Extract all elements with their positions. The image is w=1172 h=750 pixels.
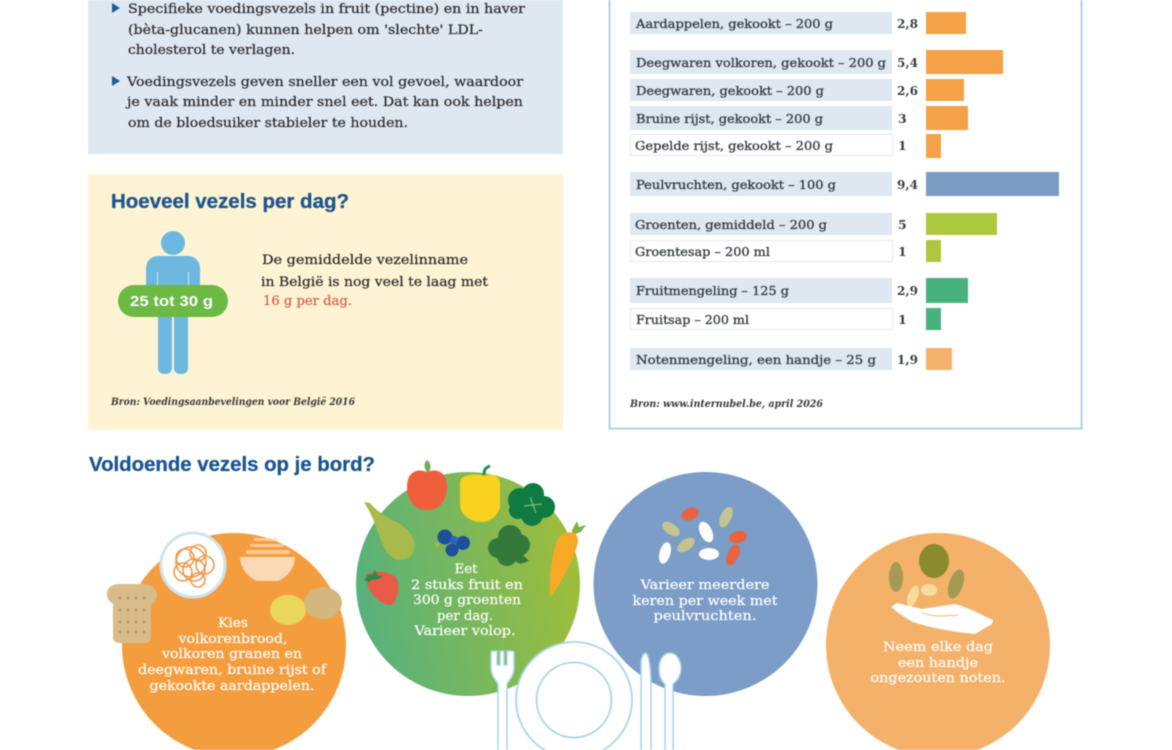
row: potatoes: Aardappelen, gekookt – 200 g (635, 16, 833, 31)
row: vegetable juice: 1 (898, 244, 907, 259)
icon: cereal bowl (240, 538, 295, 581)
icon: carrot (550, 521, 586, 597)
row: fruit juice: Fruitsap – 200 ml (636, 312, 749, 327)
text: nuts advice: een handje (898, 656, 978, 671)
row: wholegrain pasta: 5,4 (897, 55, 918, 70)
text: fruit and vegetable advice: Eet (454, 562, 478, 577)
text: nuts advice: ongezouten noten. (870, 671, 1006, 686)
row: fruit juice (630, 308, 941, 330)
row: vegetable juice (630, 240, 941, 262)
text: average intake: 16 g per dag. (263, 294, 352, 309)
icon: spinach (508, 483, 555, 526)
row: potatoes: 2,8 (897, 16, 918, 31)
text: grains advice: deegwaren, bruine rijst of (138, 663, 327, 678)
row: nuts (630, 348, 952, 370)
heading: on your plate: Voldoende vezels op je bord? (89, 454, 375, 476)
panel: fibre content bar chart (610, 0, 1082, 428)
text: fruit and vegetable advice (411, 562, 524, 639)
circle: grains (107, 533, 346, 750)
row: pasta (630, 79, 964, 101)
text: fruit and vegetable advice: 2 stuks fruit en (411, 578, 524, 593)
icon: potatoes (270, 587, 342, 625)
row: vegetable juice: Groentesap – 200 ml (635, 244, 770, 259)
bullet text: full feeling: je vaak minder en minder snel eet. Dat kan ook helpen (125, 95, 524, 110)
panel: fibre per day (88, 174, 563, 430)
row: wholegrain pasta (630, 50, 1003, 74)
row: pasta: 2,6 (897, 83, 918, 98)
icon: plate (516, 642, 632, 750)
row: brown rice: 3 (898, 111, 907, 126)
text: fruit and vegetable advice: Varieer volop. (413, 624, 516, 639)
icon: beans (657, 505, 748, 567)
text: average intake: De gemiddelde vezelinname (262, 253, 468, 268)
icon: knife (641, 653, 651, 750)
text: legumes advice: keren per week met (632, 594, 778, 609)
text: grains advice: volkoren granen en (161, 647, 303, 662)
icon: pear (364, 502, 415, 560)
circle: nuts (826, 533, 1050, 750)
heading: per day: Hoeveel vezels per dag? (111, 191, 349, 213)
source: recommendations: Bron: Voedingsaanbevelingen voor België 2016 (110, 397, 355, 408)
row: white rice (630, 134, 941, 158)
icon: broccoli (488, 525, 530, 566)
row: white rice: 1 (898, 138, 907, 153)
row: vegetables: 5 (898, 217, 907, 232)
row: vegetables: Groenten, gemiddeld – 200 g (635, 217, 827, 232)
panel: effects of fibre (88, 0, 563, 154)
text: nuts advice: Neem elke dag (883, 640, 993, 655)
row: vegetables (630, 213, 997, 235)
row: nuts: Notenmengeling, een handje – 25 g (636, 352, 876, 367)
text: fruit and vegetable advice: 300 g groenten (413, 593, 522, 608)
text: legumes advice: peulvruchten. (654, 609, 756, 624)
row: wholegrain pasta: Deegwaren volkoren, gekookt – 200 g (636, 55, 886, 70)
bullet text: full feeling: om de bloedsuiker stabieler te houden. (128, 116, 408, 131)
text: legumes advice (632, 578, 778, 624)
row: legumes (630, 172, 1059, 196)
icon: person with recommended amount (118, 231, 228, 374)
row: legumes: Peulvruchten, gekookt – 100 g (636, 177, 836, 192)
icon: spoon (659, 653, 681, 750)
icon: plate with spaghetti (161, 533, 225, 597)
row: white rice: Gepelde rijst, gekookt – 200 g (635, 138, 833, 153)
source: internubel: Bron: www.internubel.be, april 2026 (629, 399, 823, 410)
text: fruit and vegetable advice: per dag. (437, 609, 493, 624)
circle: fruit and vegetables (356, 460, 586, 696)
icon: apple (407, 460, 447, 510)
text: average intake (261, 253, 489, 309)
bullet text: full feeling (112, 75, 524, 131)
bullet text: cholesterol: (bèta-glucanen) kunnen helpen om 'slechte' LDL- (128, 23, 483, 38)
row: legumes: 9,4 (897, 177, 918, 192)
icon: person with recommended amount: 25 tot 30 g (130, 293, 213, 310)
row: nuts: 1,9 (897, 352, 918, 367)
row: mixed fruit (630, 278, 968, 303)
icon: nuts above hand (889, 544, 993, 634)
icon: yellow pepper (460, 466, 500, 522)
icon: fork (491, 651, 514, 750)
text: grains advice (138, 616, 327, 694)
icon: bread (107, 584, 157, 643)
bullet text: full feeling: Voedingsvezels geven sneller een vol gevoel, waardoor (126, 75, 524, 90)
circle: legumes (594, 472, 818, 696)
text: average intake: in België is nog veel te laag met (261, 275, 489, 290)
bullet text: cholesterol (112, 2, 526, 58)
row: mixed fruit: 2,9 (897, 283, 918, 298)
text: grains advice: gekookte aardappelen. (150, 679, 314, 694)
text: legumes advice: Varieer meerdere (639, 578, 770, 593)
icon: strawberry (364, 570, 398, 605)
text: nuts advice (870, 640, 1006, 686)
row: brown rice (630, 106, 968, 130)
row: potatoes (630, 12, 966, 34)
text: grains advice: Kies (218, 616, 248, 631)
row: brown rice: Bruine rijst, gekookt – 200 g (636, 111, 823, 126)
bullet text: cholesterol: cholesterol te verlagen. (128, 43, 295, 58)
row: pasta: Deegwaren, gekookt – 200 g (636, 83, 824, 98)
icon: plate and cutlery (491, 642, 681, 750)
row: mixed fruit: Fruitmengeling – 125 g (636, 283, 789, 298)
icon: blueberries (434, 530, 470, 556)
text: grains advice: volkorenbrood, (177, 632, 288, 647)
bullet text: cholesterol: Specifieke voedingsvezels in fruit (pectine) en in haver (128, 2, 526, 17)
row: fruit juice: 1 (898, 312, 907, 327)
